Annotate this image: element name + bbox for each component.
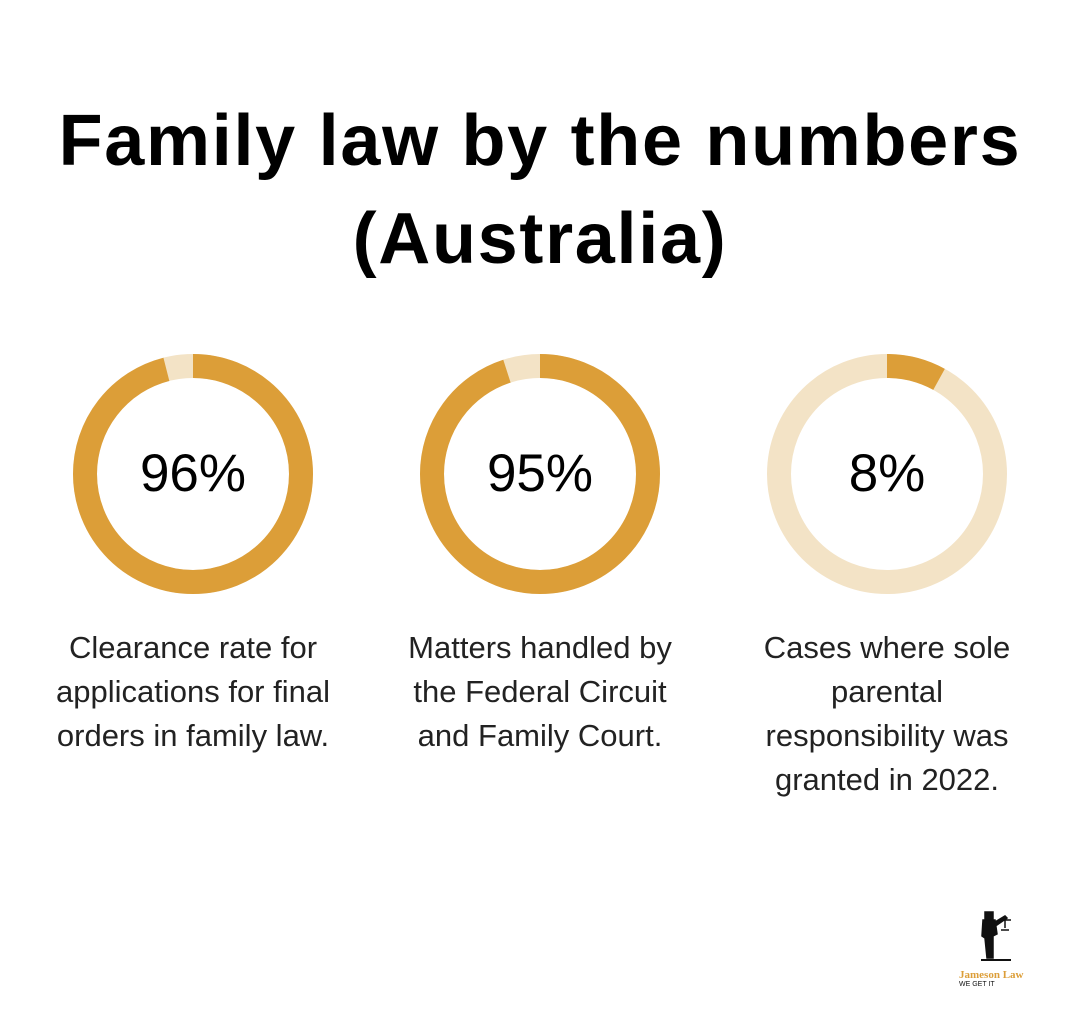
panel: 95% bbox=[420, 354, 660, 594]
caption 3: Cases where sole parental responsibility was granted in 2022. bbox=[764, 630, 1010, 797]
title: (Australia) bbox=[353, 199, 727, 279]
donut 8 bbox=[767, 354, 1007, 594]
caption 2: Matters handled by the Federal Circuit and Family Court. bbox=[408, 630, 672, 753]
donut 96 bbox=[73, 354, 313, 594]
donut 95 bbox=[420, 354, 660, 594]
logo bbox=[959, 911, 1024, 988]
text: WE GET IT bbox=[959, 981, 995, 988]
icon: justice figure bbox=[981, 911, 1011, 961]
logo text: Jameson Law bbox=[959, 969, 1023, 981]
title bbox=[59, 101, 1021, 279]
panel: 8% bbox=[767, 354, 1007, 594]
number 95: 95% bbox=[487, 444, 593, 503]
number 8: 8% bbox=[849, 444, 925, 503]
panel: 96% bbox=[73, 354, 313, 594]
title: Family law by the numbers bbox=[59, 101, 1021, 181]
number 96: 96% bbox=[140, 444, 246, 503]
caption 1: Clearance rate for applications for final orders in family law. bbox=[56, 630, 330, 753]
